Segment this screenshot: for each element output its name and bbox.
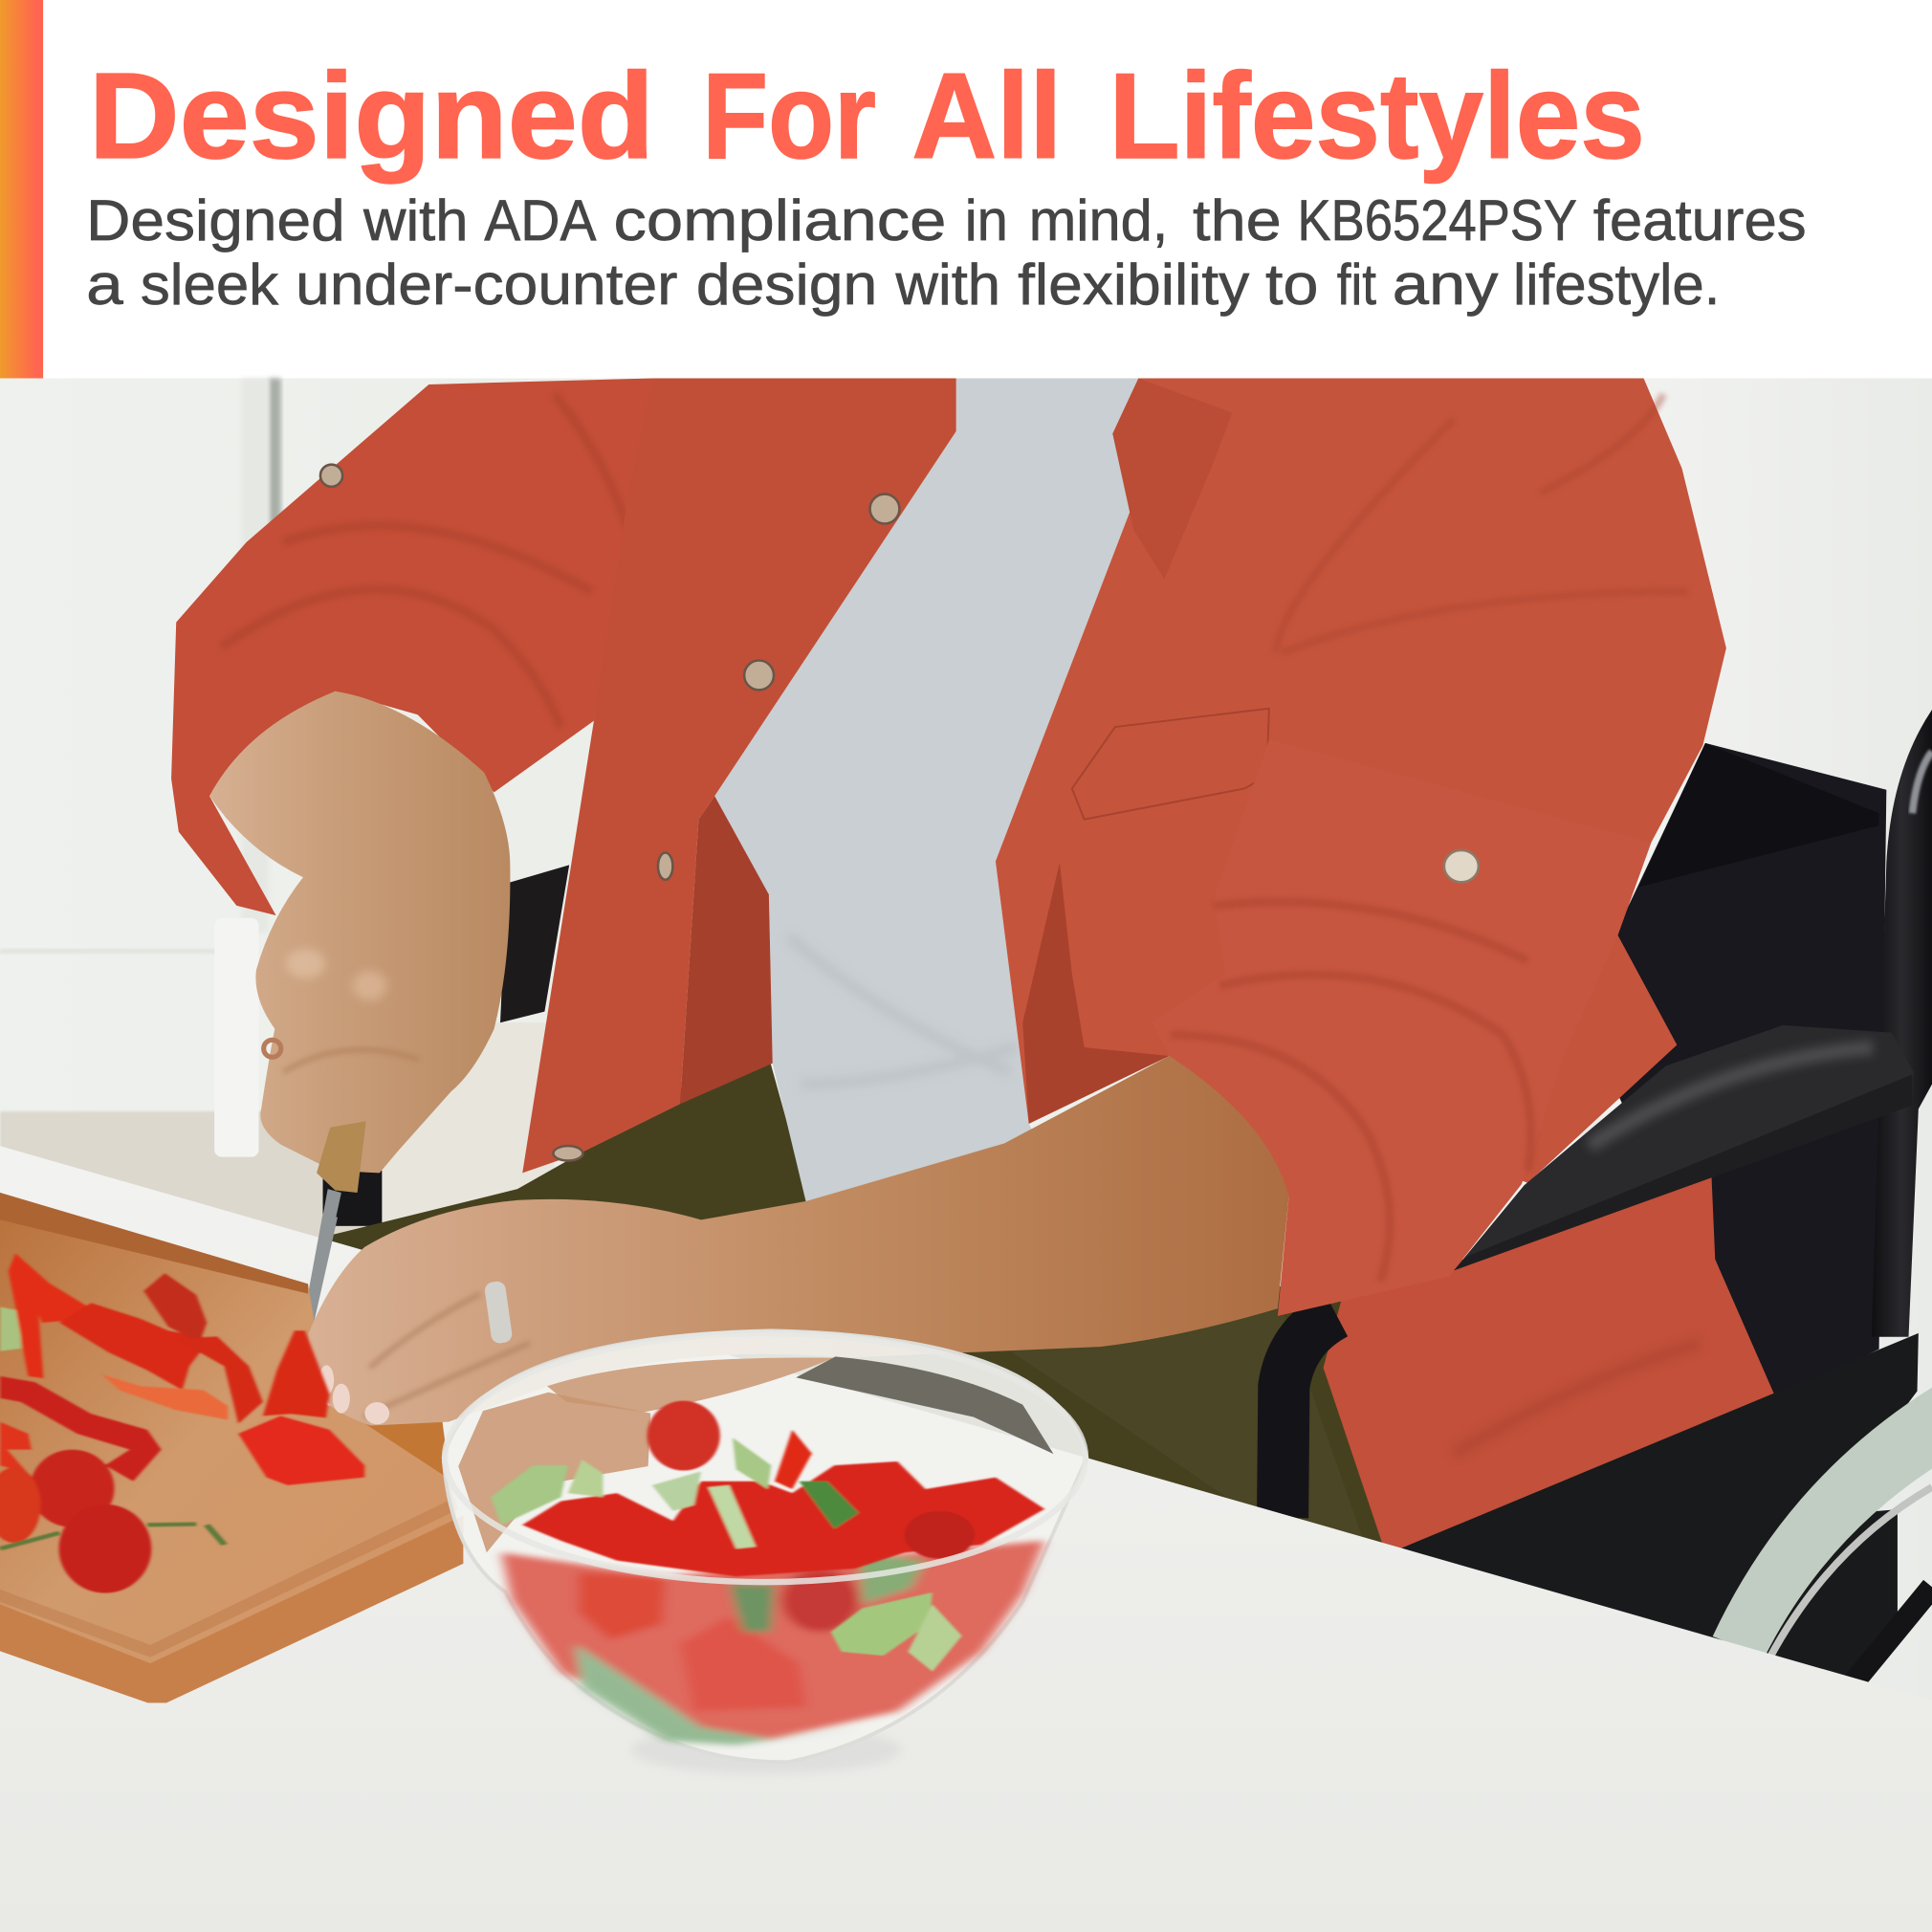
chopping arm and hand — [209, 692, 510, 1173]
glass rim highlight — [445, 1333, 1086, 1582]
title: Lifestyles — [1109, 49, 1645, 185]
subtitle text block: ADA — [484, 187, 597, 252]
title: For — [702, 49, 876, 185]
subtitle text block: the — [1193, 187, 1282, 252]
knife lower blade over the counter — [286, 1214, 338, 1415]
subtitle text block: lifestyle. — [1513, 252, 1720, 317]
left shirt front — [522, 378, 956, 1173]
subtitle text block: a — [86, 252, 123, 317]
subtitle text block: compliance — [614, 187, 946, 252]
subtitle text block: KB6524PSY — [1298, 187, 1577, 252]
subtitle text block — [86, 187, 1807, 317]
sleeve button — [1444, 850, 1479, 882]
kitchen background wall — [0, 378, 1932, 1734]
wooden cutting board — [0, 1193, 463, 1702]
rolled right sleeve — [1153, 739, 1651, 1316]
collar tag — [906, 378, 935, 396]
lower salad seen through glass — [501, 1541, 1044, 1745]
subtitle text block: fit — [1337, 252, 1376, 317]
header panel — [0, 0, 1932, 378]
subtitle text block: with — [895, 252, 1000, 317]
wedding ring — [484, 1281, 513, 1345]
chair side panel — [1399, 1333, 1919, 1685]
left sleeve — [171, 378, 653, 915]
fingernails — [319, 1365, 389, 1424]
ring — [264, 1040, 281, 1057]
shirt inner shadow — [680, 796, 773, 1104]
subtitle text block: in — [965, 187, 1008, 252]
board seen through glass — [458, 1393, 650, 1552]
subtitle text block: to — [1265, 252, 1318, 317]
wheelchair back and frame — [323, 710, 1932, 1405]
knife — [286, 1121, 366, 1415]
subtitle text block: design — [696, 252, 877, 317]
subtitle text block: features — [1593, 187, 1807, 252]
wheel — [1713, 1388, 1932, 1683]
lower part of the red shirt — [1324, 1146, 1775, 1555]
subtitle text block: any — [1393, 252, 1499, 317]
left armrest behind the woman — [500, 865, 569, 1022]
chopped peppers and tomatoes on the board — [0, 1253, 364, 1593]
hand seen through glass — [547, 1357, 834, 1412]
subtitle text block: flexibility — [1018, 252, 1250, 317]
red shirt — [171, 378, 1726, 1316]
collar — [1112, 378, 1232, 579]
salad — [491, 1401, 1044, 1745]
title — [89, 49, 1645, 185]
subtitle text block: under-counter — [296, 252, 678, 317]
reflected knife in glass — [796, 1356, 1053, 1454]
inner shirt shadow panel — [1022, 863, 1170, 1124]
grey t-shirt — [714, 378, 1138, 1201]
upper salad vegetables — [491, 1401, 1044, 1672]
right shirt body — [996, 378, 1726, 1183]
olive trousers — [323, 1057, 1417, 1602]
gradient accent bar — [0, 0, 43, 378]
forearm and hand on the food — [308, 1056, 1289, 1426]
subtitle text block: sleek — [141, 252, 279, 317]
chair tube — [1283, 1313, 1335, 1518]
glass salad bowl — [444, 1330, 1087, 1774]
subtitle text block: with — [362, 187, 469, 252]
subtitle text block: Designed — [86, 187, 345, 252]
armrest — [1454, 1025, 1914, 1270]
title: All — [911, 49, 1062, 185]
counter top — [0, 1146, 1932, 1932]
shirt buttons — [320, 465, 899, 1161]
pocket — [1072, 709, 1269, 820]
subtitle text block: mind, — [1029, 187, 1168, 252]
title: Designed — [89, 49, 654, 185]
